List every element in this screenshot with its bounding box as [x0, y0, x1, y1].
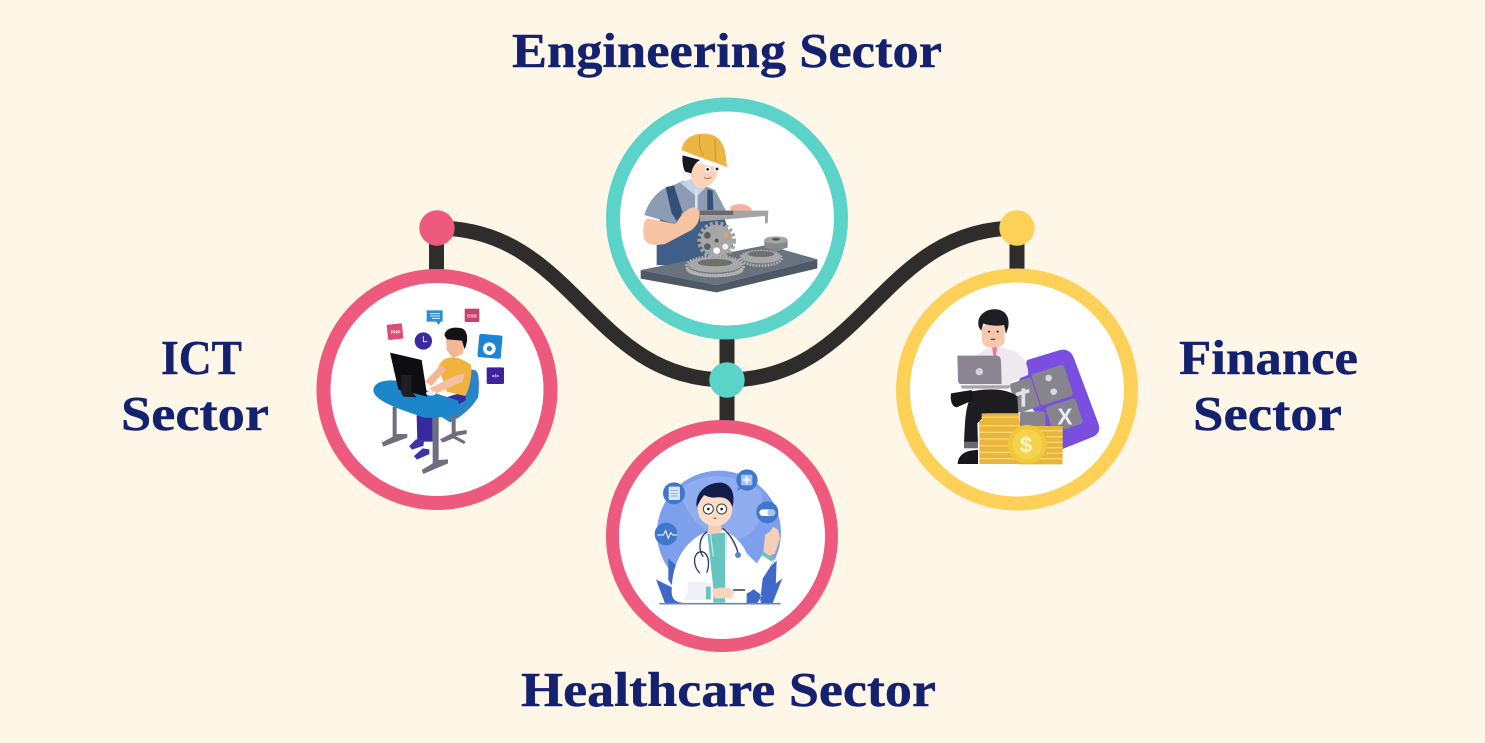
icon: finance person on coins: [951, 309, 1099, 464]
heading: Engineering Sector: Engineering Sector: [512, 23, 942, 78]
heading: ICT Sector: ICT: [161, 330, 242, 385]
panel: ICT circle: [324, 276, 550, 503]
heading: Healthcare Sector: Healthcare Sector: [521, 662, 936, 717]
heading: ICT Sector: Sector: [121, 386, 269, 441]
icon: engineer with gears: [641, 134, 817, 292]
panel: healthcare circle: [612, 426, 832, 646]
node: pink: [419, 210, 455, 246]
heading: Finance Sector: Finance: [1179, 330, 1358, 385]
node: yellow: [999, 210, 1035, 246]
panel: engineering circle: [613, 104, 841, 332]
icon: doctor: [655, 469, 783, 606]
heading: Finance Sector: [1179, 330, 1358, 441]
icon: developer at desk: </>: [492, 374, 499, 380]
heading: ICT Sector: [121, 330, 269, 441]
icon: developer at desk: PHP: [391, 330, 400, 335]
icon: developer at desk: [373, 309, 504, 474]
icon: finance person on coins: $: [1020, 433, 1032, 458]
icon: developer at desk: CSS: [467, 313, 477, 318]
icon: finance person on coins: X: [1057, 403, 1073, 429]
connector line: [436, 228, 1017, 425]
heading: Finance Sector: Sector: [1193, 386, 1342, 441]
panel: finance circle: [903, 276, 1131, 504]
node: teal: [709, 362, 745, 398]
